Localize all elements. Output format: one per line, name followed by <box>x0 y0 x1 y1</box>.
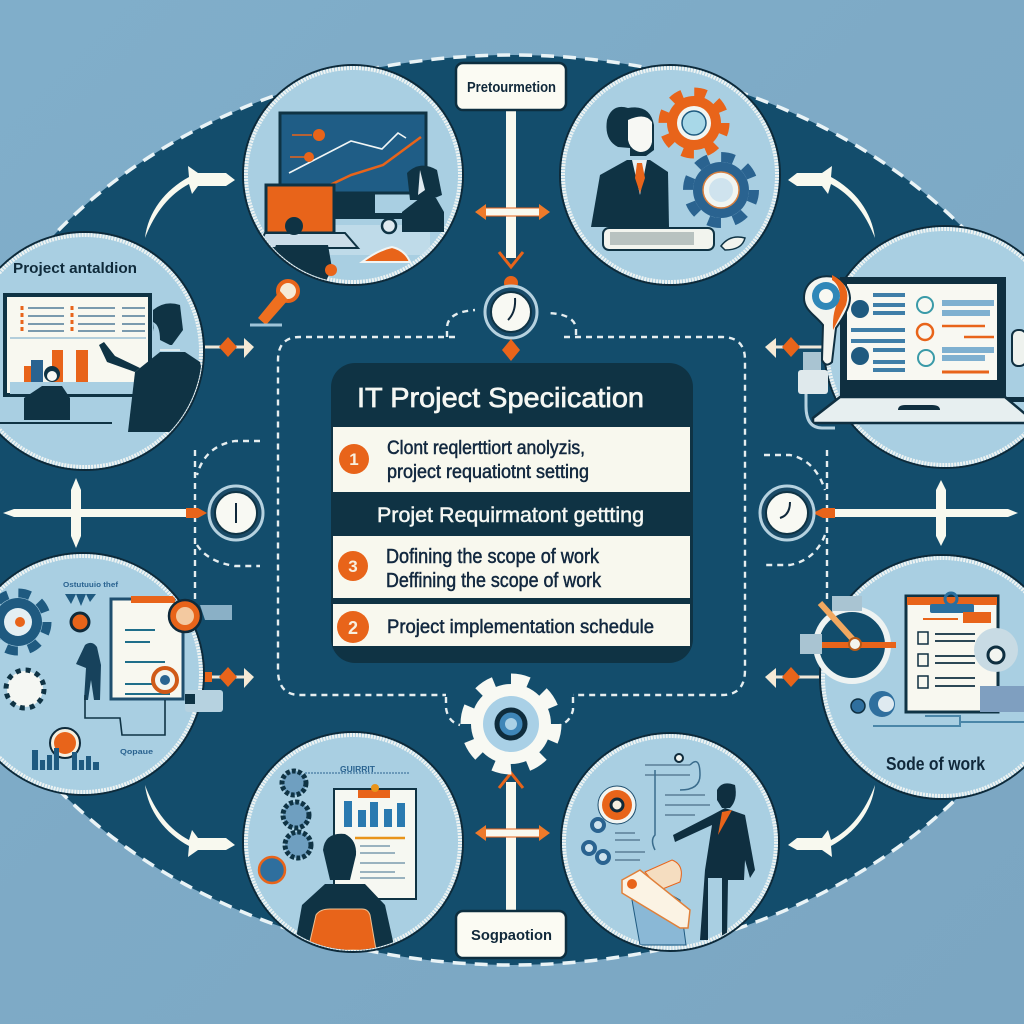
panel: left top circle, project analysis <box>0 232 212 470</box>
orange tip <box>813 508 835 518</box>
icon: orange gear <box>663 92 725 154</box>
orange screen <box>266 185 334 233</box>
keyboard <box>258 233 358 248</box>
orange chair <box>308 909 376 950</box>
tag <box>185 690 223 712</box>
row 2: Dofining the scope of work <box>386 546 600 568</box>
keyboard <box>603 228 714 250</box>
central panel: IT project specification <box>331 363 693 663</box>
small heading: GUIRRIT <box>340 765 375 774</box>
clipboard chart <box>334 784 416 899</box>
icon: map pin <box>804 275 850 365</box>
small icons <box>851 691 895 717</box>
arrow: top right curved <box>788 166 875 238</box>
panel: right top circle, laptop report <box>798 226 1024 468</box>
panel: bottom left circle, seated reviewer <box>243 732 463 952</box>
top connector: label, stem, cross arrow, clock <box>456 63 566 361</box>
circle title: Project antaldion <box>13 260 137 277</box>
bottom connector: gear, stem, cross arrow, label <box>456 680 566 958</box>
icon: blue gear <box>0 593 47 651</box>
presenter <box>99 303 212 432</box>
right connector: arrow and clock <box>760 480 1018 546</box>
circle title: Sode of work <box>886 754 986 774</box>
presentation screen <box>5 295 150 395</box>
arrow: right bottom small <box>765 667 825 688</box>
title: IT Project Speciication <box>357 382 644 413</box>
label box: Sogpaotion <box>471 927 552 944</box>
small caption: Ostutuuio thef <box>63 582 119 589</box>
presenter <box>673 783 755 940</box>
stem <box>506 108 516 258</box>
section heading: Projet Requirmatont gettting <box>377 504 644 527</box>
clipboard <box>906 593 998 712</box>
icon: documents and envelope <box>622 860 690 945</box>
row 1: project requatiotnt setting <box>387 462 589 483</box>
arrow: right top small <box>765 337 825 358</box>
screen rows <box>851 295 994 372</box>
cross arrow <box>3 478 187 548</box>
row 2: Deffining the scope of work <box>386 570 602 592</box>
cross arrow <box>475 204 550 220</box>
magnifier ring <box>800 596 896 681</box>
label box <box>456 63 566 110</box>
panel: right bottom circle, scope of work <box>800 555 1024 799</box>
laptop <box>813 277 1024 423</box>
row 3: 2 <box>348 618 358 638</box>
icon: small badge <box>259 857 285 883</box>
clock <box>209 486 263 540</box>
icon: orange pointer <box>250 264 337 325</box>
small figure <box>76 643 101 700</box>
small circles <box>583 819 609 863</box>
icon: orange badge small <box>71 613 89 631</box>
row 1: Clont reqlerttiort anolyzis, <box>387 438 585 459</box>
icon: white gear <box>6 670 44 708</box>
label box: Pretourmetion <box>467 79 556 96</box>
orange node <box>504 276 518 290</box>
orange tip <box>186 508 207 518</box>
gear <box>467 680 555 768</box>
icon: blue gear <box>688 157 754 223</box>
desk person <box>274 217 332 280</box>
seated person <box>294 834 395 950</box>
panel: bottom right circle, presenter and documents <box>561 733 779 951</box>
left connector: arrow and clock <box>3 478 263 548</box>
arrow: top left curved <box>145 166 235 238</box>
row 1 <box>333 427 690 492</box>
seated colleague <box>402 166 444 232</box>
gear cluster <box>974 628 1018 672</box>
chevron arrowhead <box>499 773 523 788</box>
orange diamond <box>502 339 520 361</box>
cross arrow <box>830 480 1018 546</box>
panel: top left circle, analytics <box>243 65 463 290</box>
side device <box>1012 330 1024 366</box>
chevron arrowhead <box>499 252 523 267</box>
label box <box>456 911 566 958</box>
arrow: bottom right curved <box>788 785 875 857</box>
icon: orange badge middle <box>153 668 177 692</box>
stem <box>506 782 516 912</box>
dashed connector network <box>195 310 827 725</box>
row 1: 1 <box>349 450 359 469</box>
icon: orange badge bottom <box>50 728 80 758</box>
icon: orange target <box>598 786 636 824</box>
bar chart <box>32 748 99 770</box>
panel: left bottom circle, process diagram <box>0 553 232 795</box>
panel: top right circle, engineer and gears <box>560 65 780 285</box>
monitor chart <box>280 113 426 193</box>
row 3: Project implementation schedule <box>387 617 654 638</box>
arrow: bottom left curved <box>145 785 235 857</box>
row 2 <box>333 536 690 598</box>
arrow: left top small <box>205 337 254 358</box>
clock <box>760 486 814 540</box>
clipboard <box>111 596 183 699</box>
engineer <box>591 107 669 227</box>
icon: orange badge top <box>169 600 201 632</box>
icon: three gears <box>282 771 311 858</box>
arrow: left bottom small <box>190 667 254 688</box>
small caption: Qopaue <box>120 749 153 756</box>
row 2: 3 <box>348 557 358 576</box>
row 3 <box>333 604 690 646</box>
clock <box>485 286 537 338</box>
connector block <box>798 352 835 428</box>
cross arrow <box>475 825 550 841</box>
audience person <box>24 366 70 420</box>
text lines <box>615 765 710 860</box>
